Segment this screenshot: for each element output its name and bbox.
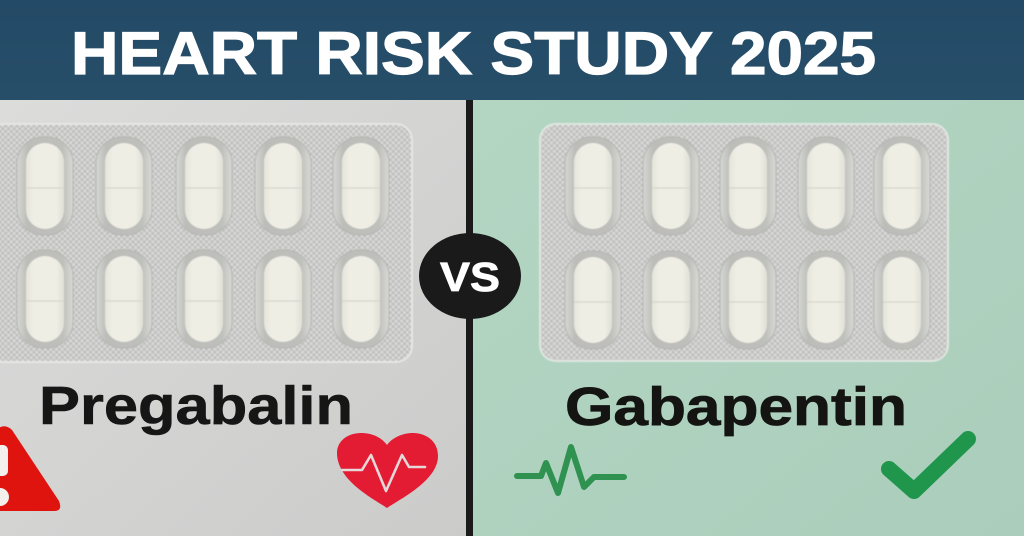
blister pack: Pregabalin	[0, 124, 412, 362]
VS badge: VS	[440, 254, 500, 300]
title: HEART RISK STUDY 2025	[71, 20, 876, 87]
icon: green check mark	[889, 439, 968, 491]
icon: green pulse line	[517, 447, 624, 493]
panel: Gabapentin background	[470, 100, 1024, 536]
icon: heart with pulse	[337, 433, 438, 508]
icon: warning triangle	[0, 426, 60, 511]
VS badge	[419, 233, 521, 319]
blister pack: Gabapentin	[540, 124, 948, 361]
center divider	[466, 100, 473, 536]
label: Gabapentin: Gabapentin	[565, 377, 907, 437]
header band	[0, 0, 1024, 100]
label: Pregabalin: Pregabalin	[39, 376, 353, 436]
panel: Pregabalin background	[0, 100, 470, 536]
